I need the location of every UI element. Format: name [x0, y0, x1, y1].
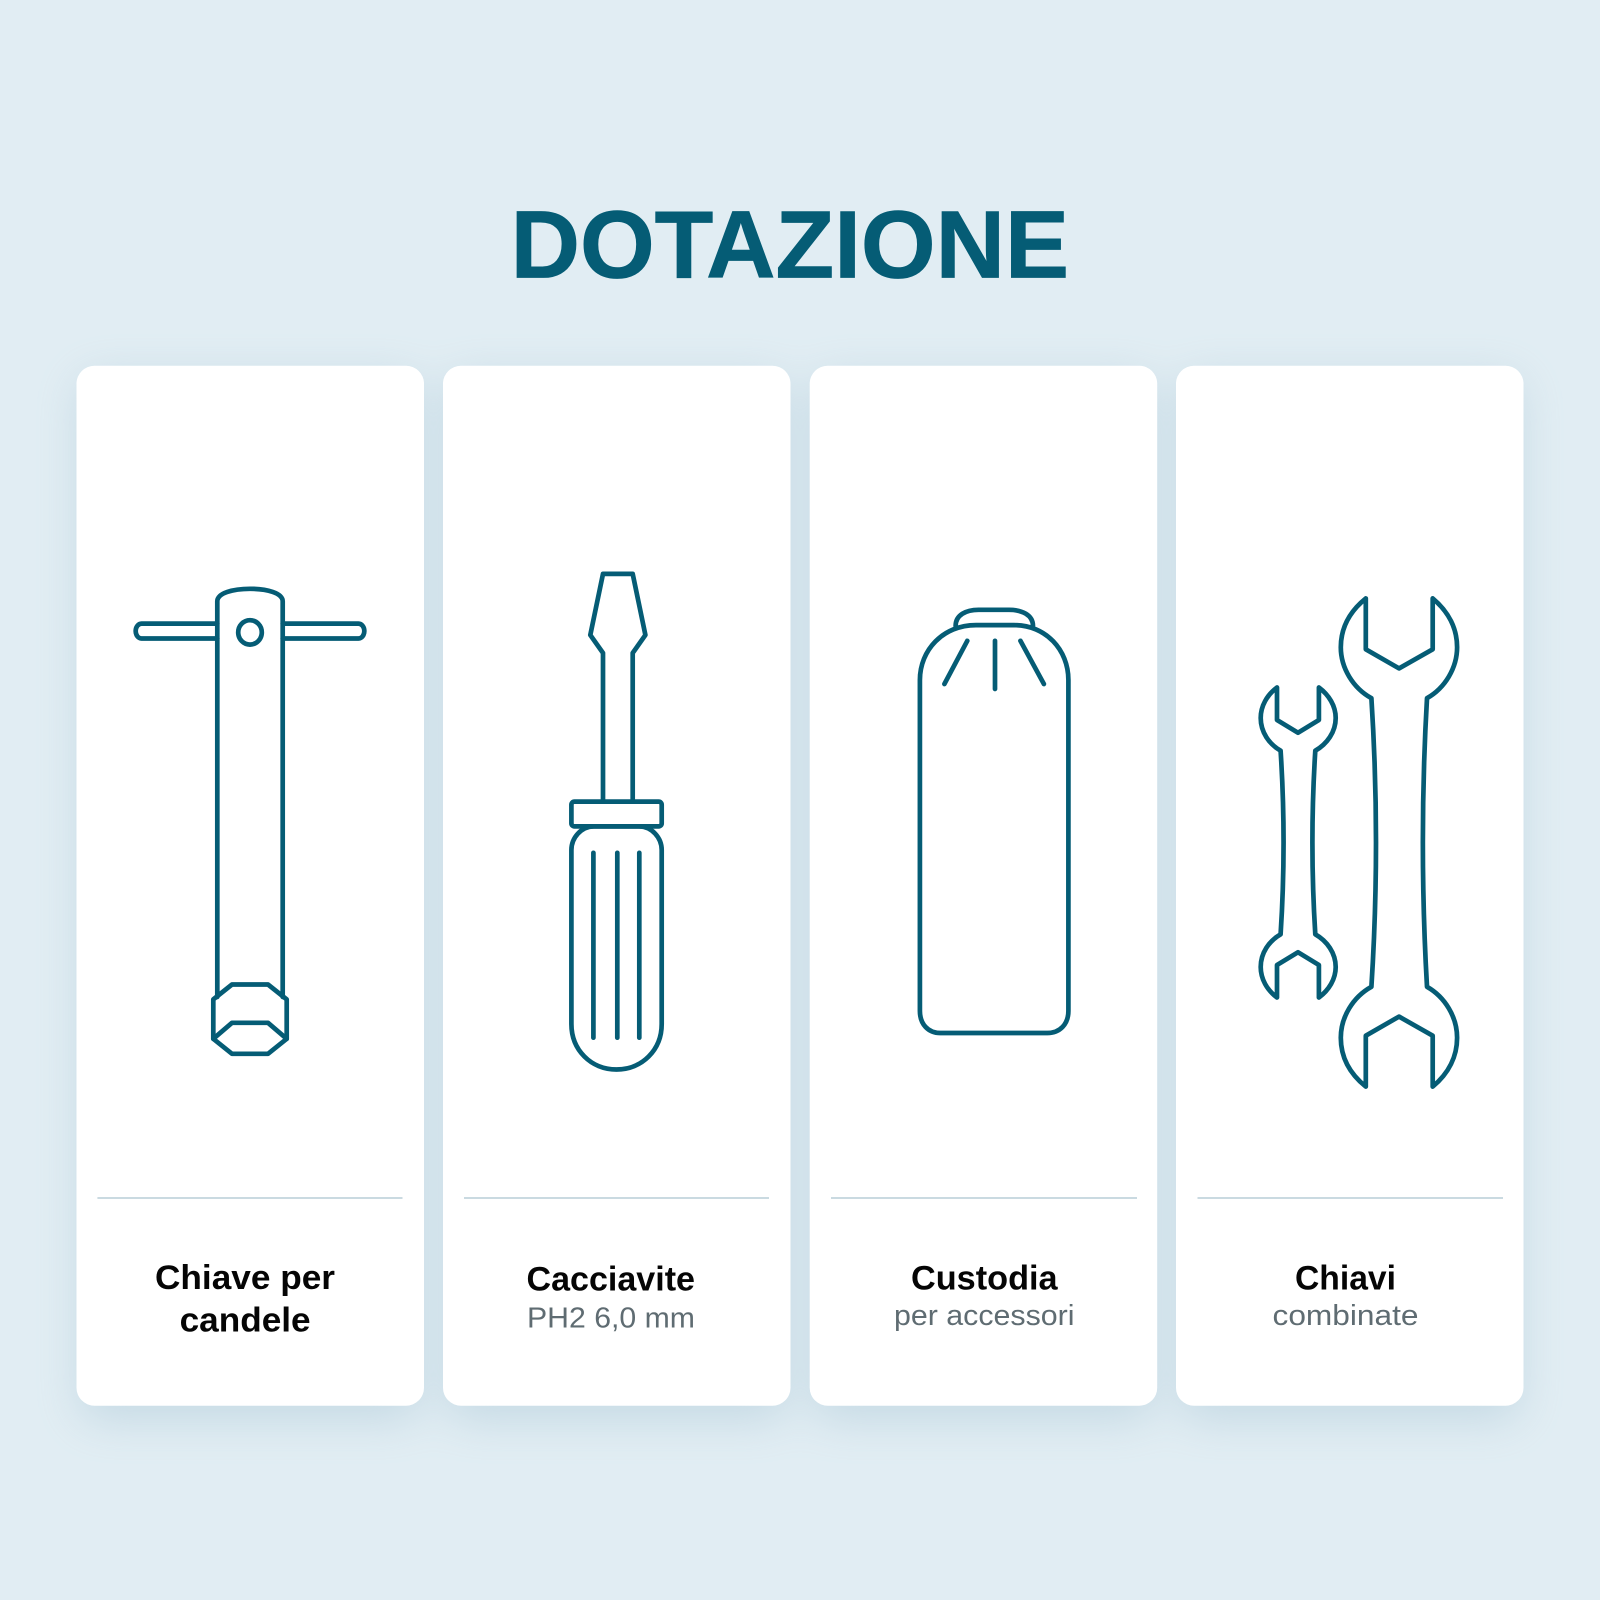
title: DOTAZIONE [511, 192, 1069, 299]
icon: large wrench [1341, 598, 1457, 1087]
divider [831, 1197, 1137, 1199]
sublabel: PH2 6,0 mm [527, 1302, 695, 1334]
icon: pouch [920, 610, 1068, 1033]
panel: Chiave per candele [76, 366, 424, 1406]
panel: Chiavi combinate [1176, 366, 1524, 1406]
divider [1198, 1197, 1503, 1199]
label: Chiave per [155, 1259, 335, 1297]
icon: small wrench [1261, 688, 1336, 998]
panel: Cacciavite [443, 366, 790, 1406]
panel: Custodia [810, 366, 1157, 1406]
icon: spark plug wrench [136, 589, 364, 1054]
sublabel: combinate [1272, 1300, 1418, 1332]
label: Cacciavite [526, 1261, 695, 1299]
icon: screwdriver [571, 574, 662, 1070]
label: Chiavi [1295, 1259, 1396, 1297]
label: Custodia [911, 1259, 1059, 1297]
label second line: candele [180, 1302, 311, 1340]
divider [464, 1197, 769, 1199]
divider [97, 1197, 403, 1199]
sublabel: per accessori [894, 1300, 1074, 1332]
